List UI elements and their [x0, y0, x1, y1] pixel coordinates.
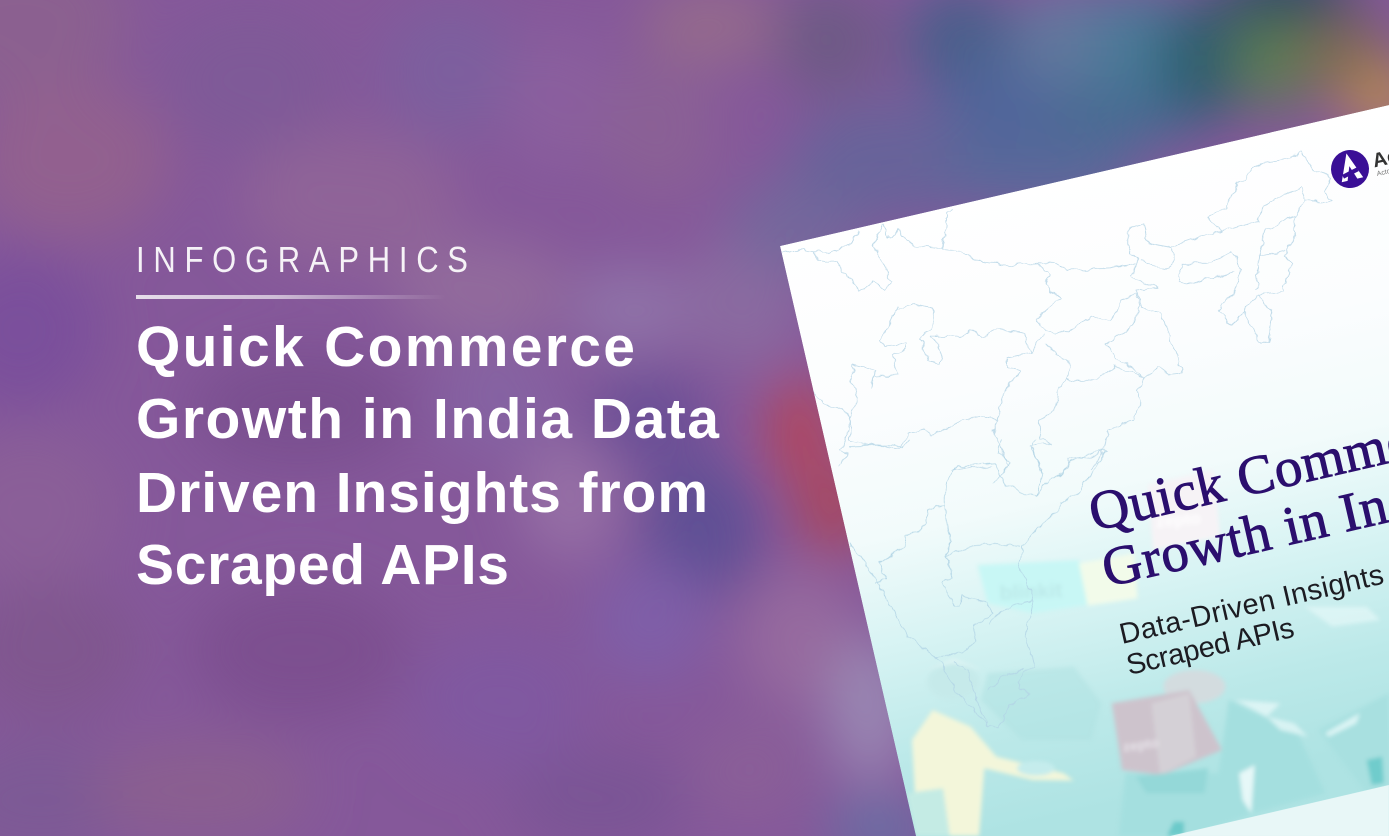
- shop sign: blinkit: blinkit: [999, 579, 1063, 605]
- cover logo: [1331, 150, 1389, 188]
- cover photo: delivery riders: [907, 470, 1389, 836]
- main heading: Quick Commerce: [136, 315, 635, 379]
- bottom white strip: [1170, 785, 1389, 836]
- cover subtitle: Scraped APIs: [1123, 612, 1297, 682]
- main heading: Growth in India Data: [136, 387, 720, 451]
- shop sign: zepto: zepto: [1155, 509, 1202, 531]
- map of India outline: north: [782, 152, 1333, 470]
- main heading: Driven Insights from: [136, 461, 708, 525]
- tilted report cover: [780, 105, 1389, 836]
- delivery box: zepto: zepto: [1122, 735, 1160, 755]
- delivery box: zepto: [1112, 670, 1225, 775]
- section label: INFOGRAPHICS: INFOGRAPHICS: [136, 241, 468, 281]
- shop sign: zepto: [1150, 479, 1220, 550]
- main heading: Scraped APIs: [136, 533, 509, 597]
- shop sign: blinkit: [977, 560, 1088, 613]
- main heading: [136, 315, 720, 597]
- divider rule: [136, 295, 446, 299]
- rider: yellow shirt: [912, 658, 1074, 836]
- cover subtitle: Data-Driven Insights: [1116, 559, 1387, 651]
- map of India outline: south: [850, 440, 1107, 728]
